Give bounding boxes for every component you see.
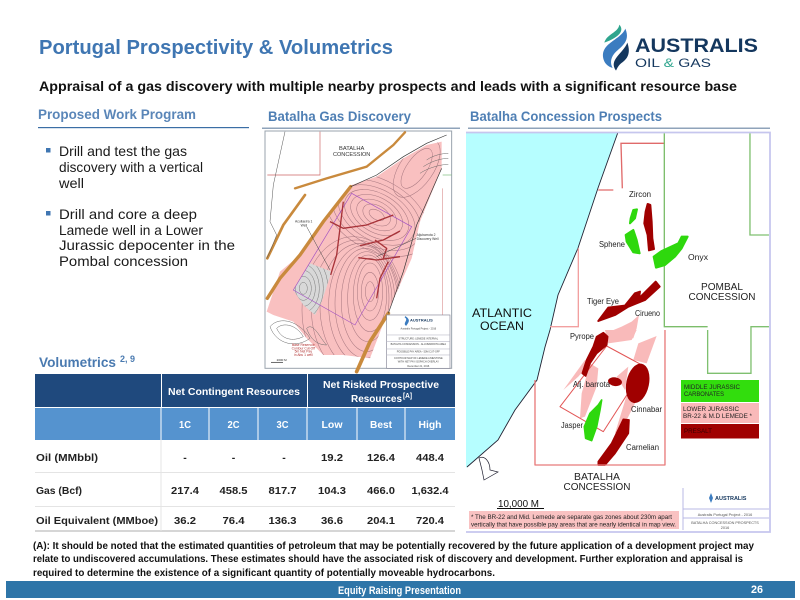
label: Atlantic Ocean: OCEAN (480, 321, 524, 333)
table sub-header row: 2C (228, 419, 240, 431)
prospect: Cirueno (600, 315, 639, 338)
legend: Middle Jurassic Carbonates: MIDDLE JURASSIC (684, 385, 741, 391)
table row: oil equivalent: 36.2 (174, 515, 196, 527)
map label: Batalha Concession: BATALHA (339, 146, 365, 152)
table row: gas: 466.0 (367, 485, 395, 497)
footer title: Equity Raising Presentation (338, 585, 461, 597)
scale bar: 2000 M (277, 358, 287, 362)
label: Batalha Concession: BATALHA (574, 472, 620, 483)
table sub-header row: High (418, 419, 442, 431)
footnote (33, 541, 754, 579)
legend: Lower Jurassic (681, 403, 759, 423)
logo flame (603, 25, 629, 71)
table row: oil: 126.4 (367, 452, 395, 464)
map labels: Cirueno (635, 309, 660, 318)
table row: oil: - (183, 452, 187, 464)
prospect: Jasper (584, 400, 602, 441)
prospect: Onyx (654, 237, 688, 268)
table row: oil (36, 452, 444, 464)
map labels (561, 190, 708, 452)
map title block: Australis Portugal Project - 2016 (698, 513, 752, 517)
orange faults (267, 132, 405, 372)
heading: Volumetrics: Volumetrics (39, 355, 116, 370)
Batalha concession boundary (535, 330, 665, 465)
well labels (295, 219, 439, 241)
red faults (330, 202, 400, 298)
prospects north group (598, 204, 688, 338)
purple possible area outline (293, 193, 412, 325)
bullet 2: Lamede well in a Lower (59, 222, 203, 238)
bullet 1 (46, 143, 203, 191)
heading: Batalha Concession Prospects: Batalha Concession Prospects (470, 109, 662, 124)
page number: 26 (751, 584, 763, 596)
title block (387, 315, 450, 368)
prospect: Camelian (598, 419, 629, 465)
label: Batalha Concession (564, 472, 630, 493)
table row: gas: Gas (Bcf) (36, 485, 82, 497)
label: Pombal Concession (688, 282, 756, 303)
bullet list: work program (46, 143, 235, 269)
title block: BATALHA CONCESSION - ALJUBARROTA AREA (391, 343, 446, 346)
table row: oil equivalent: 36.6 (321, 515, 343, 527)
table row: oil: Oil (MMbbl) (36, 452, 98, 464)
table sub-header row (35, 408, 455, 440)
map footnote: * The BR-22 and Mid. Lemede are separate gas zones about 230m apart (471, 514, 672, 521)
map labels: Zircon (629, 190, 651, 199)
red area of interest outline (560, 346, 645, 432)
gray contoured area (293, 263, 332, 315)
title: Portugal Prospectivity & Volumetrics (39, 37, 393, 59)
sea (466, 133, 618, 468)
table row: gas: 217.4 (171, 485, 199, 497)
table row: oil equivalent (36, 515, 444, 527)
heading: Batalha Gas Discovery: Batalha Gas Discovery (268, 109, 411, 124)
map: Batalha concession prospects (466, 132, 770, 532)
legend: Middle Jurassic Carbonates: CARBONATES (684, 392, 724, 398)
table header row: Resources (351, 393, 402, 405)
bullet 2: Drill and core a deep (59, 206, 197, 222)
heading: proposed work program: Proposed Work Program (38, 107, 196, 122)
table sub-header row: Low (322, 419, 343, 431)
prospects south group (535, 330, 665, 465)
well labels: Discovery Well (417, 237, 439, 241)
map labels: Tiger Eye (587, 297, 620, 306)
title block: AUSTRALIS (410, 318, 433, 323)
map labels: Sphene (599, 240, 626, 249)
legend: Lower Jurassic: LOWER JURASSIC (683, 407, 740, 413)
map footnote (469, 511, 679, 529)
concession boundaries (550, 133, 769, 330)
label: Atlantic Ocean: ATLANTIC (472, 308, 532, 320)
title block: December 21, 2016 (407, 365, 430, 368)
bullet 2: Pombal concession (59, 253, 188, 269)
label: Atlantic Ocean (472, 308, 532, 333)
frame (466, 132, 770, 532)
red callout: Base Reservoir (292, 343, 316, 347)
footnote: relate to undiscovered accumulations. These estimates should have the associated risk of discovery and development. Further exploration and appraisal is (33, 554, 743, 565)
map title block: 2016 (721, 526, 729, 530)
map labels: Pyrope (570, 332, 595, 341)
prospect: Cinnabar (622, 361, 653, 405)
prospect: Aljubarrota (607, 376, 623, 387)
table row: gas: 817.7 (268, 485, 297, 497)
table row: oil equivalent: Oil Equivalent (MMboe) (36, 515, 158, 527)
title block: STRUCTURE: LEMEDE INTERVAL (399, 337, 439, 340)
contours (302, 142, 440, 358)
red callout: 5m Net Pay (295, 350, 312, 354)
table header row: Net Risked Prospective (323, 379, 439, 391)
table sub-header row: 3C (276, 419, 289, 431)
map labels: Carnelian (626, 443, 659, 452)
table row: gas (36, 485, 449, 497)
icon: Australis logo (603, 25, 758, 71)
legend: Lower Jurassic: BR-22 & M.D LEMEDE * (683, 414, 753, 420)
legend: Presalt: PRESALT (684, 429, 712, 435)
table row: oil equivalent: 720.4 (416, 515, 444, 527)
table row: oil equivalent: 204.1 (367, 515, 395, 527)
table row: gas: 458.5 (220, 485, 248, 497)
title block: Australis Portugal Project - 2016 (400, 327, 437, 330)
label: Pombal Concession: POMBAL (701, 282, 743, 293)
bullet 2 (46, 206, 235, 269)
concession lines (267, 132, 320, 175)
map title block (683, 488, 769, 530)
scale bar (271, 358, 287, 363)
bullet 1: well (58, 175, 84, 191)
table header row (35, 374, 455, 407)
table header row: Net Contingent Resources (168, 386, 300, 398)
footnote: (A): It should be noted that the estimated quantities of petroleum that may be potentially recovered by the future application of a development project may (33, 541, 754, 552)
map labels: Alj. barrota (573, 380, 611, 389)
map labels: Onyx (688, 253, 708, 262)
prospect: Sphene (626, 209, 640, 253)
bullet 2: Jurassic depocenter in the (59, 237, 235, 253)
map title block: AUSTRALIS (715, 496, 747, 502)
prospect: Zircon (644, 204, 654, 250)
map label: Batalha Concession: CONCESSION (333, 152, 370, 158)
table row: oil: - (282, 452, 286, 464)
label: Pombal Concession: CONCESSION (688, 292, 756, 303)
legend (681, 380, 759, 438)
table row: oil: - (232, 452, 236, 464)
table: volumetrics (35, 374, 455, 531)
well labels: Aljubarrota 2 (417, 233, 436, 237)
table header row: [A] (403, 393, 412, 400)
red callout: Contour Cut-Off (292, 346, 315, 350)
heading: Volumetrics: 2, 9 (120, 354, 135, 364)
map: Batalha gas discovery structure map (265, 131, 452, 383)
red callout: in Abu 1 well (294, 353, 313, 357)
logo wordmark: AUSTRALIS (635, 35, 758, 57)
subtitle: Appraisal of a gas discovery with multiple nearby prospects and leads with a significant resource base (39, 78, 737, 94)
map labels: Cinnabar (631, 405, 662, 414)
footnote: required to determine the existence of a significant quantity of potentially moveable hydrocarbons. (33, 568, 495, 579)
well labels: Aculiaeira 1 (295, 219, 313, 223)
table row: gas: 104.3 (318, 485, 346, 497)
logo tagline: OIL & GAS (635, 56, 711, 70)
bullet 1: discovery with a vertical (59, 159, 203, 175)
red callout (292, 343, 316, 357)
legend: Middle Jurassic Carbonates (681, 380, 759, 402)
map label: Batalha Concession (333, 146, 370, 158)
prospect: Tiger Eye (598, 282, 660, 321)
prospect: Pyrope (582, 333, 608, 376)
table sub-header row: 1C (179, 419, 191, 431)
table row: oil equivalent: 76.4 (222, 515, 245, 527)
closed contours south west (270, 153, 448, 345)
table row: gas: 1,632.4 (412, 485, 449, 497)
map title block: BATALHA CONCESSION PROSPECTS (691, 521, 759, 525)
table row: oil equivalent: 136.3 (268, 515, 297, 527)
bullet 1: Drill and test the gas (59, 143, 187, 159)
well labels: Well (301, 223, 307, 227)
footer bar (6, 581, 795, 598)
table row: oil: 448.4 (416, 452, 444, 464)
title block: CONTOUR MAP OF LEMEDE LIMESTONE (394, 357, 443, 360)
table row: oil: 19.2 (321, 452, 343, 464)
title block: WITH NET PAY ISOPACH OVERLAY (398, 360, 439, 363)
map labels: Jasper (561, 421, 583, 430)
table sub-header row: Best (370, 419, 392, 431)
label: Batalha Concession: CONCESSION (564, 482, 630, 493)
title block: POSSIBLE PAY AREA - 50M CUT-OFF (397, 350, 440, 353)
map footnote: vertically that have possible pay areas that are nearly identical in map view. (471, 522, 676, 528)
scale bar: 10,000 M (498, 499, 539, 510)
